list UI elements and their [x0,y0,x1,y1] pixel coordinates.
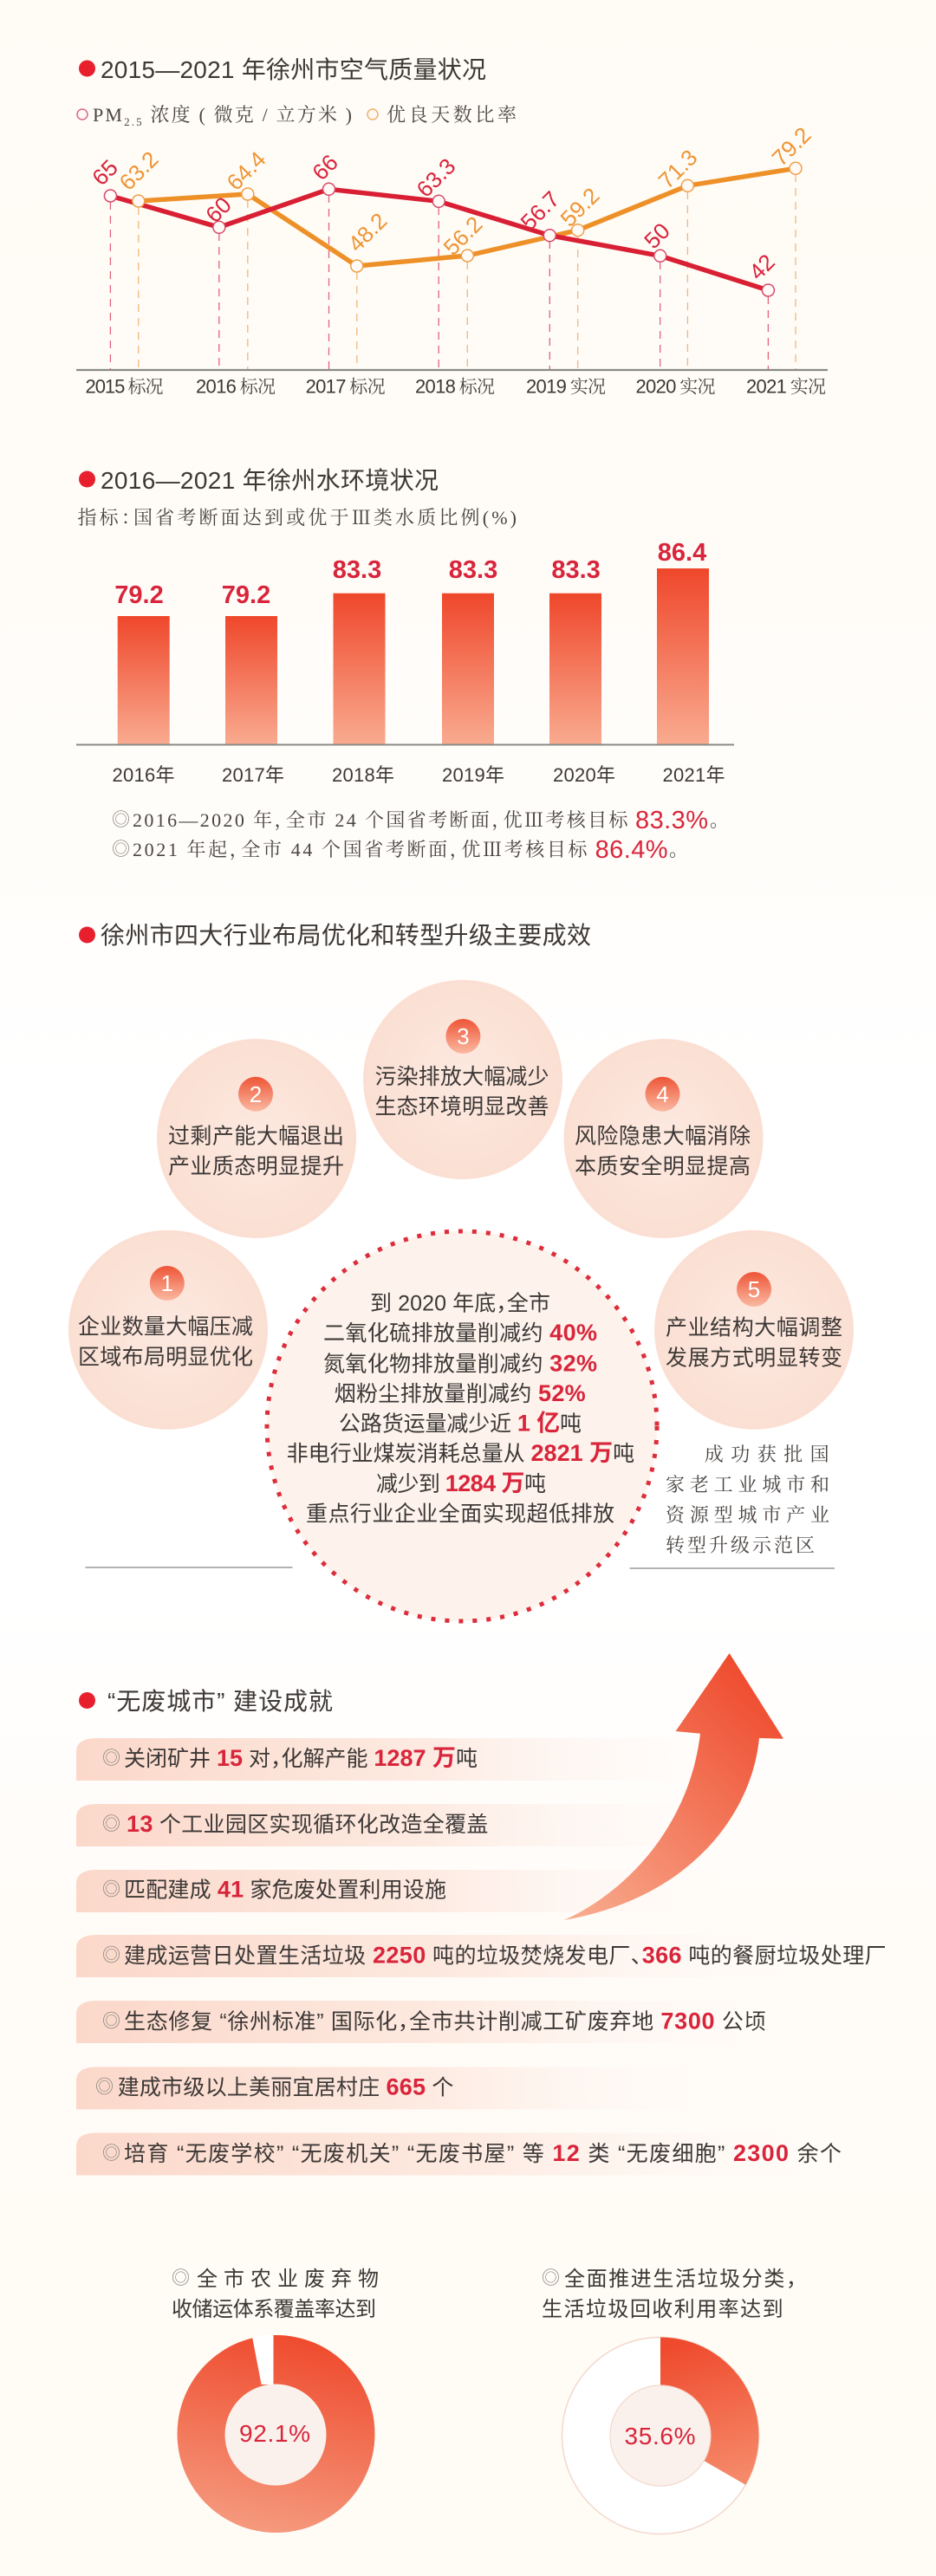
note line 2: 。 [669,839,688,860]
row 2: ◎ [102,1814,120,1834]
row 7: ◎ [102,2144,120,2164]
bar values: 86.4 [658,539,706,567]
petal 4: 风险隐患大幅消除 [575,1125,751,1149]
row backgrounds [76,1738,867,2175]
caption: 收储运体系覆盖率达到 [172,2298,376,2321]
x axis labels [85,376,826,397]
center dotted circle: 非电行业煤炭消耗总量从 2821 万吨 [287,1440,634,1466]
value labels: 50 [639,217,675,254]
markers [104,162,802,296]
panel: left donut agricultural waste [172,2268,379,2533]
value labels: 63.3 [412,153,460,202]
heading: air quality: 2015—2021 年徐州市空气质量状况 [101,56,486,83]
petal 2 [157,1039,356,1238]
center dotted circle: 二氧化硫排放量削减约 40% [323,1320,597,1346]
x axis labels: 2019 实况 [526,376,606,397]
petal 3: 生态环境明显改善 [374,1095,549,1119]
year labels: 2018年 [332,764,394,786]
petal 1: 1 [161,1270,173,1296]
bars [118,568,709,745]
center dotted circle: 氮氧化物排放量削减约 32% [323,1350,597,1376]
bar values: 79.2 [222,581,270,609]
caption: ◎ [542,2268,560,2288]
donut chart [562,2338,759,2534]
petal 2: 产业质态明显提升 [168,1154,344,1178]
center dotted circle: 到 2020 年底，全市 [370,1291,550,1315]
value labels: 42 [744,249,780,285]
year labels: 2016年 [113,764,175,786]
row 4: ◎ [102,1946,120,1965]
baseline [76,743,734,745]
drop lines [110,174,796,369]
petal 4: 本质安全明显提高 [575,1154,751,1178]
row 3: ◎ [102,1880,120,1899]
note line 2: ◎ [112,840,130,860]
donut chart: 35.6% [624,2423,695,2449]
row 1: 关闭矿井 15 对，化解产能 1287 万吨 [124,1745,478,1771]
center dotted circle: 重点行业企业全面实现超低排放 [306,1502,614,1527]
bar values: 83.3 [449,556,497,584]
x axis labels: 2018 标况 [415,376,495,397]
row 6: ◎ [95,2078,114,2097]
heading: water: 2016—2021 年徐州水环境状况 [101,467,439,494]
petal 3 [363,980,562,1179]
year labels: 2020年 [553,764,615,786]
note line 2 [112,836,688,864]
value labels: 48.2 [343,208,392,256]
x axis labels: 2021 实况 [746,376,826,397]
side note: 成功获批国 [705,1444,829,1465]
x axis labels: 2020 实况 [636,376,716,397]
petal 1 [68,1230,268,1430]
x axis labels: 2015 标况 [85,376,163,397]
row 2: 13 个工业园区实现循环化改造全覆盖 [127,1811,488,1837]
petal 4 [563,1039,763,1238]
row 4: 建成运营日处置生活垃圾 2250 吨的垃圾焚烧发电厂、366 吨的餐厨垃圾处理厂 [124,1943,887,1969]
petal 3: 污染排放大幅减少 [374,1065,549,1089]
value labels [87,122,816,285]
bar values: 83.3 [333,556,381,584]
legend [77,104,517,128]
petal 2: 过剩产能大幅退出 [168,1125,344,1149]
note line 1: 。 [710,809,729,831]
panel: right donut household waste [542,2268,796,2534]
line: air quality days [139,168,796,266]
caption: 全面推进生活垃圾分类， [564,2268,796,2291]
side note [666,1444,829,1556]
value labels: 63.2 [114,146,163,195]
panel: industry transformation results [68,922,854,1621]
row 5: 生态修复 “徐州标准” 国际化，全市共计削减工矿废弃地 7300 公顷 [124,2008,766,2034]
petal 3: 3 [457,1023,470,1049]
row 5: ◎ [102,2011,120,2031]
x axis labels: 2017 标况 [306,376,386,397]
note line 1: 2016—2020 年，全市 24 个国省考断面，优Ⅲ考核目标 [133,809,628,832]
note line 1 [112,807,729,834]
petal 5: 发展方式明显转变 [666,1346,842,1371]
bar values: 83.3 [551,556,601,584]
panel: water environment bar chart [76,467,734,864]
center dotted circle [267,1231,657,1621]
value labels: 79.2 [767,122,816,171]
side note: 家老工业城市和 [666,1474,829,1496]
row 7: 培育 “无废学校” “无废机关” “无废书屋” 等 12 类 “无废细胞” 2300 余个 [124,2140,842,2166]
row 6: 建成市级以上美丽宜居村庄 665 个 [118,2074,453,2100]
rising arrow [564,1653,783,1920]
petal 2: 2 [250,1081,262,1107]
note line 2: 86.4% [595,836,668,864]
petal 1: 区域布局明显优化 [78,1345,253,1369]
petal 5: 产业结构大幅调整 [666,1315,842,1340]
value labels: 56.7 [516,186,564,235]
value labels: 71.3 [653,145,702,193]
side note: 转型升级示范区 [666,1535,815,1556]
axis [76,369,828,371]
note line 2: 2021 年起，全市 44 个国省考断面，优Ⅲ考核目标 [133,839,588,861]
center dotted circle: 公路货运量减少近 1 亿吨 [339,1411,582,1437]
caption [172,2268,379,2321]
petal 4: 4 [656,1081,669,1107]
caption [542,2268,796,2321]
donut chart: 92.1% [239,2420,310,2447]
legend: 优良天数比率 [387,104,517,126]
petal 5 [654,1230,854,1430]
side note: 资源型城市产业 [666,1504,829,1526]
bar values [114,539,706,609]
petal 5: 5 [748,1276,760,1302]
year labels [113,764,725,786]
indicator note: 指标：国省考断面达到或优于Ⅲ类水质比例(%) [78,507,517,529]
value labels: 64.4 [222,146,270,195]
legend: 浓度 ( 微克 / 立方米 ) [144,104,352,126]
year labels: 2019年 [442,764,504,786]
decorative rules [85,1567,835,1568]
caption: ◎ [172,2268,190,2288]
x axis labels: 2016 标况 [196,376,276,397]
legend: 2.5 [124,115,142,128]
center dotted circle: 烟粉尘排放量削减约 52% [335,1380,586,1406]
caption: 全市农业废弃物 [197,2268,379,2291]
legend: PM [93,104,122,126]
value labels: 56.2 [439,211,487,260]
line: PM2.5 [110,189,768,290]
panel: air quality line chart [76,56,828,397]
bar values: 79.2 [114,581,164,609]
row 1: ◎ [102,1749,120,1768]
center dotted circle: 减少到 1284 万吨 [376,1470,546,1496]
heading: zero-waste city: “无废城市” 建设成就 [107,1688,333,1715]
petal 1: 企业数量大幅压减 [78,1315,253,1340]
value labels: 66 [307,149,343,185]
donut chart [177,2334,374,2533]
year labels: 2021年 [662,764,725,786]
value labels: 59.2 [556,183,604,231]
value labels: 60 [200,191,237,228]
year labels: 2017年 [222,764,284,786]
row 3: 匹配建成 41 家危废处置利用设施 [124,1877,446,1903]
heading: four industries: 徐州市四大行业布局优化和转型升级主要成效 [101,922,591,949]
note line 1: ◎ [112,810,130,830]
note line 1: 83.3% [635,807,708,834]
caption: 生活垃圾回收利用率达到 [542,2298,783,2321]
value labels: 65 [87,154,123,191]
panel: zero-waste city achievements [76,1653,887,2175]
